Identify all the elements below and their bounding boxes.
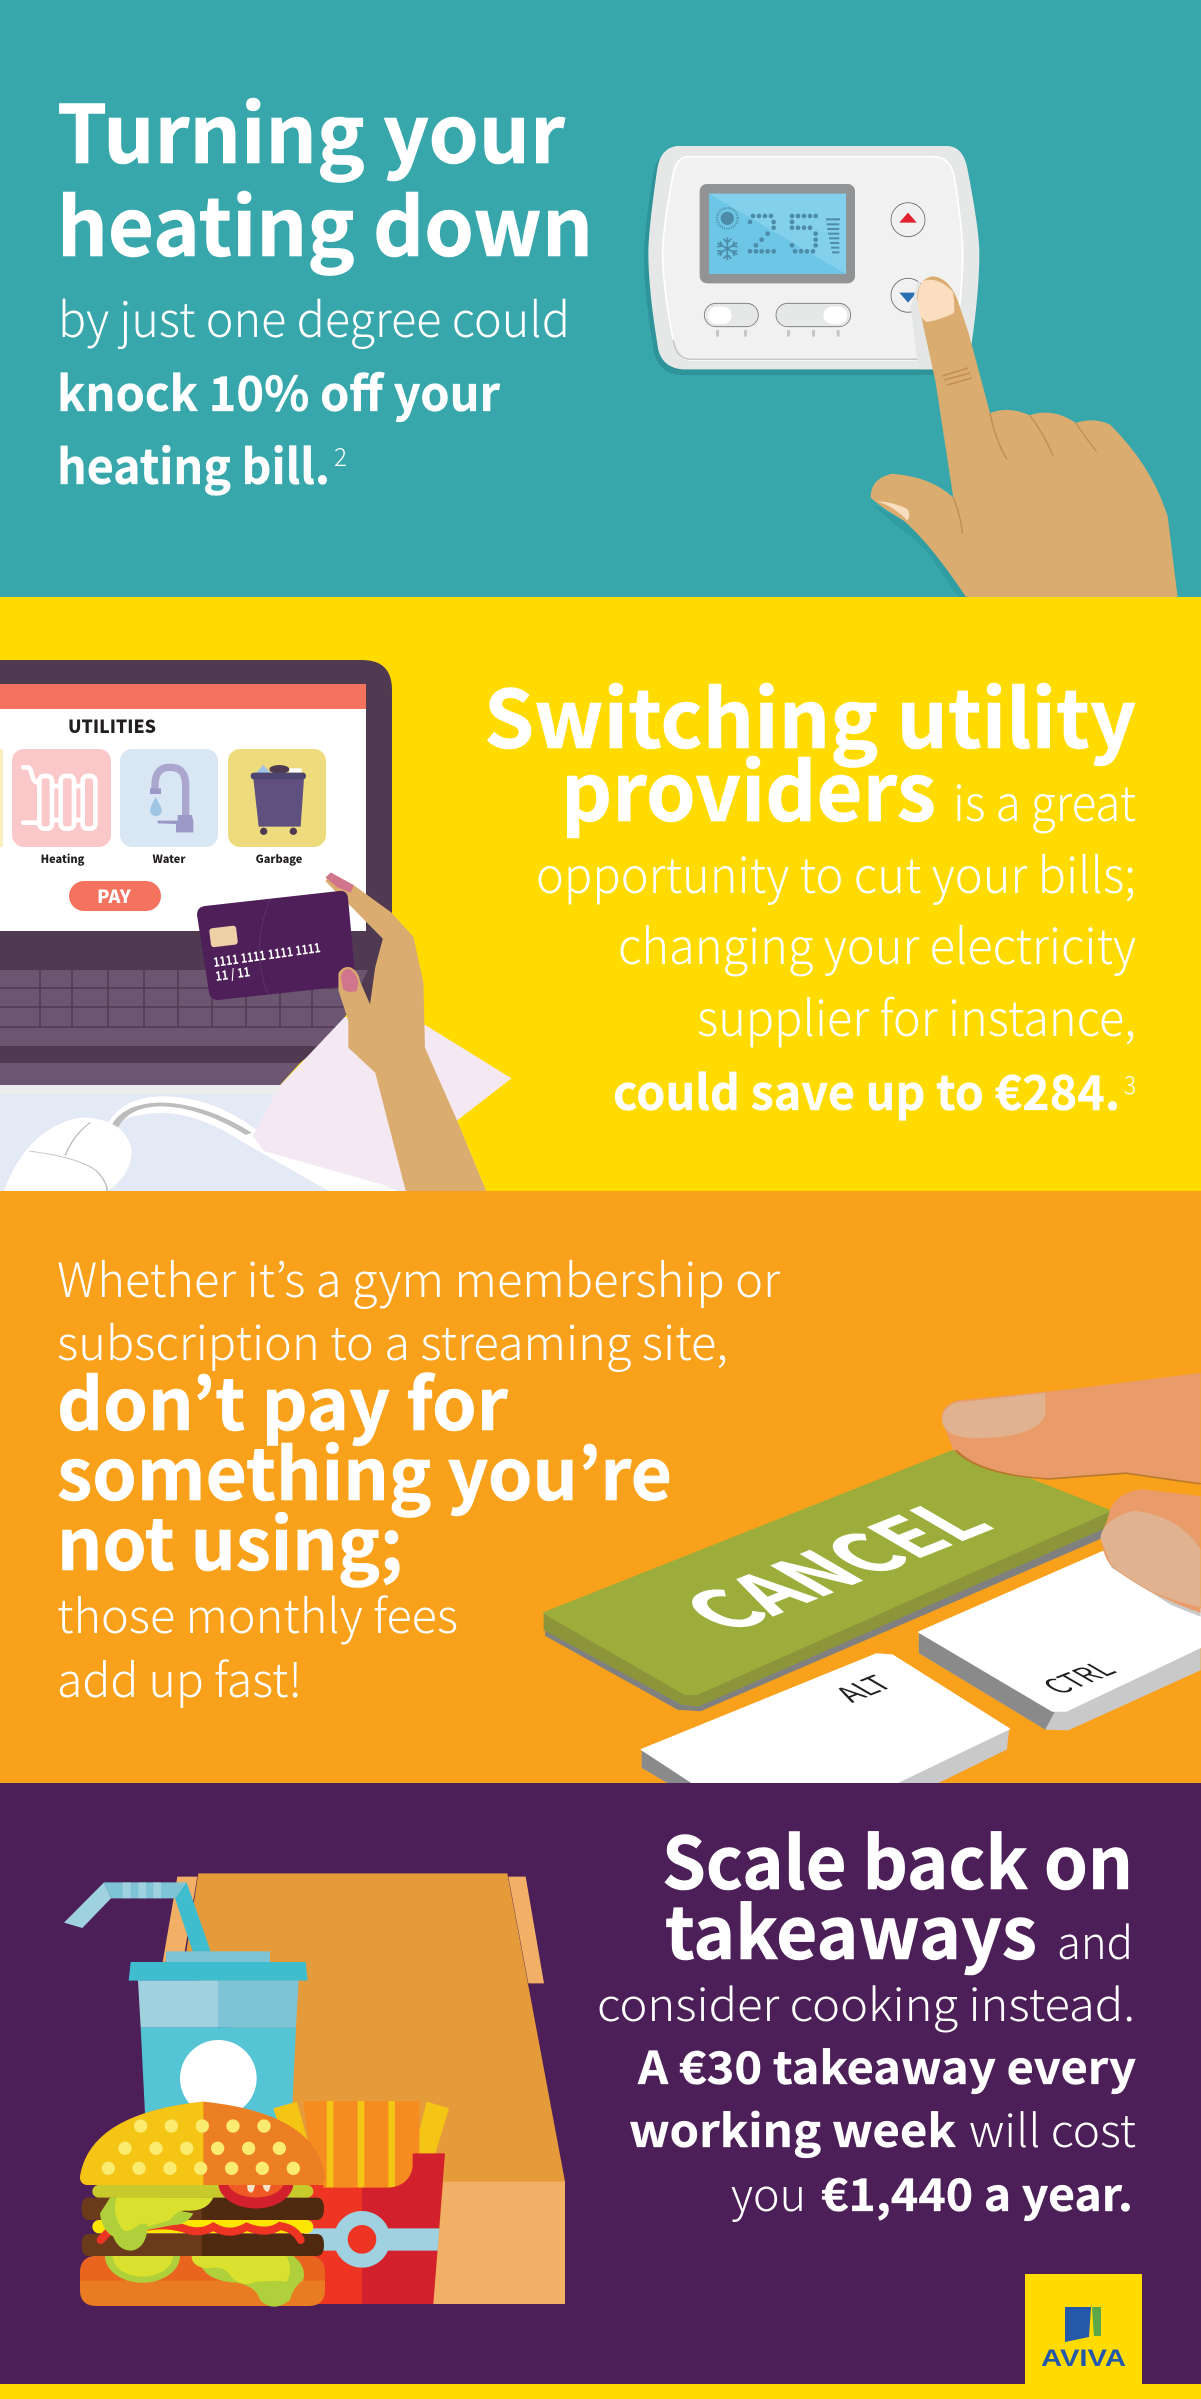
text block: heating saving: heating bill.: [57, 428, 330, 498]
text block: heating saving: 2: [334, 438, 347, 474]
tile: heating: Heating: [41, 851, 85, 867]
tile: water: Water: [153, 851, 186, 867]
heading: don't pay for something you're not using: don’t pay for: [57, 1349, 509, 1451]
text block: utility saving: opportunity to cut your bills;: [536, 837, 1136, 908]
fingernail: [918, 280, 954, 322]
heading: don't pay for something you're not using: not using;: [57, 1489, 403, 1591]
tile: heating: [12, 749, 111, 867]
fries box: [273, 2101, 449, 2304]
heading: switching utility providers: Switching utility: [484, 656, 1136, 772]
text block: utility saving: [536, 765, 1136, 1124]
mouse and cable: [4, 1096, 398, 1191]
key: ctrl: [919, 1552, 1201, 1730]
text block: utility saving: could save up to €284.: [613, 1054, 1120, 1124]
key label: alt: ALT: [821, 1668, 903, 1708]
heading: turning your heating down: Turning your: [57, 71, 565, 187]
fingers: [942, 1373, 1201, 1617]
burger: [80, 2102, 325, 2307]
text block: takeaway cost: you: [731, 2159, 806, 2224]
tile: garbage: [228, 749, 326, 867]
text block: takeaway cost: and: [1057, 1907, 1133, 1972]
text block: takeaway cost: will cost: [969, 2095, 1136, 2160]
text block: monthly fees: [57, 1578, 458, 1711]
text block: subscription intro: subscription to a streaming site,: [57, 1305, 728, 1374]
heading: turning your heating down: [57, 71, 593, 280]
heading: don't pay for something you're not using: something you’re: [57, 1419, 672, 1521]
text block: takeaway cost: [597, 1907, 1136, 2224]
text block: heating saving: by just one degree could: [58, 281, 570, 351]
panel: utilities: [0, 597, 1201, 1191]
logo: aviva: AVIVA: [1041, 2345, 1126, 2372]
screen heading: utilities: UTILITIES: [68, 713, 156, 739]
heading: scale back on takeaways: takeaways: [665, 1875, 1037, 1980]
text block: takeaway cost: working week: [629, 2095, 956, 2160]
text block: takeaway cost: consider cooking instead.: [597, 1969, 1135, 2034]
illustration: keyboard keys: [544, 1373, 1201, 1783]
footer strip: [0, 2384, 1201, 2399]
text block: heating saving: [57, 281, 570, 498]
text block: utility saving: 3: [1124, 1066, 1136, 1102]
sleeve: [253, 1017, 511, 1191]
icon: hand pressing button: [871, 276, 1178, 597]
heading: switching utility providers: providers: [561, 729, 936, 845]
thermostat screen: [700, 184, 855, 283]
panel: heating: [0, 0, 1201, 597]
arm and fingers: [325, 872, 486, 1191]
heading: switching utility providers: [484, 656, 1136, 845]
heading: scale back on takeaways: [662, 1805, 1133, 1980]
key: cancel: [544, 1449, 1110, 1711]
text block: takeaway cost: A €30 takeaway every: [637, 2032, 1136, 2097]
credit card: 1111 1111 1111 1111: [212, 937, 322, 971]
text block: utility saving: changing your electricity: [618, 908, 1136, 979]
text block: monthly fees: those monthly fees: [57, 1578, 458, 1647]
text block: monthly fees: add up fast!: [57, 1642, 302, 1711]
icon: thermostat: [644, 146, 979, 375]
button: pay: PAY: [97, 883, 132, 909]
up and down buttons: [891, 203, 925, 312]
key: alt: [642, 1654, 1009, 1783]
illustration: takeaway meal: [64, 1873, 565, 2307]
button: pay: [69, 881, 161, 911]
text block: takeaway cost: €1,440 a year.: [821, 2159, 1133, 2224]
tile: water: [120, 749, 218, 867]
drink cup: [64, 1882, 308, 2120]
paper bag: [163, 1873, 565, 2304]
text block: heating saving: knock 10% off your: [57, 355, 500, 425]
heading: scale back on takeaways: Scale back on: [662, 1805, 1133, 1910]
keyboard: [0, 970, 368, 1085]
logo: aviva: [1025, 2274, 1142, 2399]
tile: garbage: Garbage: [256, 851, 303, 867]
illustration: laptop and desk: [0, 660, 420, 1191]
panel: subscriptions: [0, 1191, 1201, 1783]
panel: takeaways: [0, 1783, 1201, 2399]
text block: utility saving: supplier for instance,: [697, 980, 1136, 1051]
credit card: [197, 891, 356, 1000]
credit card: 11 / 11: [214, 961, 251, 985]
thumb: [338, 967, 375, 1048]
hand holding credit card: [4, 872, 511, 1191]
heading: don't pay for something you're not using: [57, 1349, 672, 1591]
slider switches: [704, 303, 851, 337]
heading: turning your heating down: heating down: [57, 164, 593, 280]
text block: subscription intro: Whether it’s a gym membership or: [57, 1242, 780, 1311]
text block: utility saving: is a great: [953, 765, 1136, 836]
text block: subscription intro: [57, 1242, 780, 1374]
key label: cancel: CANCEL: [646, 1480, 1017, 1646]
key label: ctrl: CTRL: [1029, 1654, 1126, 1700]
